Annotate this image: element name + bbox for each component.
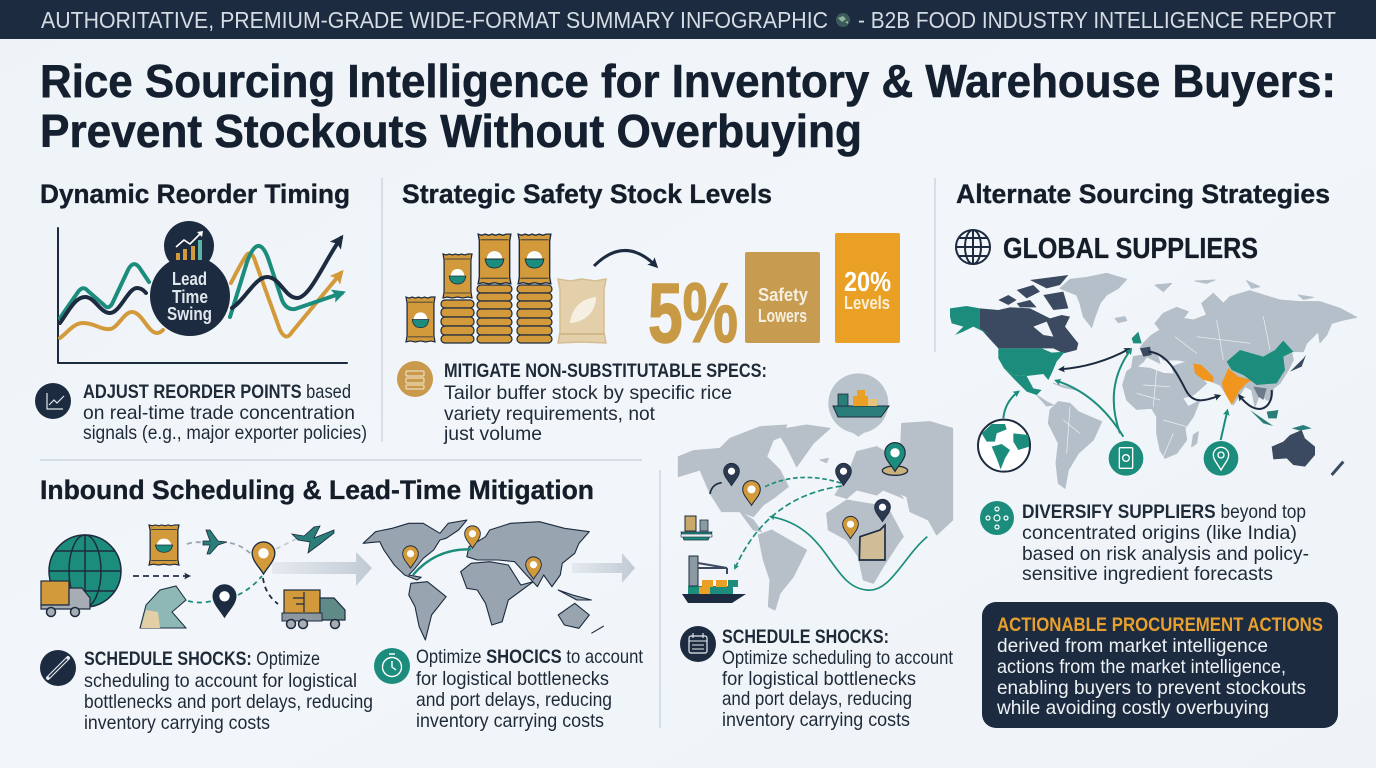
panel: alternate sourcing strategies <box>950 179 1357 728</box>
text: mitigate specs: just volume <box>443 423 542 445</box>
top banner: - B2B FOOD INDUSTRY INTELLIGENCE REPORT <box>858 7 1336 33</box>
panel: strategic safety stock levels <box>397 179 900 445</box>
world map: supplier regions <box>950 273 1357 488</box>
callout: actionable procurement actions: ACTIONABLE PROCUREMENT ACTIONS <box>997 614 1323 636</box>
text: diversify suppliers: concentrated origins (like India) <box>1022 522 1297 544</box>
text: schedule shocks right: SCHEDULE SHOCKS: <box>722 626 889 648</box>
lead time swing badge: Time <box>172 287 208 307</box>
icon: container ship top <box>833 390 889 417</box>
text: schedule shocks left: bottlenecks and port delays, reducing <box>84 691 373 713</box>
callout: actionable procurement actions: actions from the market intelligence, <box>997 656 1286 678</box>
text: diversify suppliers: based on risk analysis and policy- <box>1022 543 1309 565</box>
text: schedule shocks left: SCHEDULE SHOCKS: Optimize <box>84 648 320 670</box>
lead time swing badge: Lead <box>172 269 207 289</box>
text: mitigate specs: variety requirements, not <box>444 403 656 425</box>
pin: map south asia <box>526 557 541 579</box>
pin: gold africa <box>843 516 858 539</box>
icon: map fragment <box>140 586 186 628</box>
icon: small ship <box>681 516 712 540</box>
text: schedule shocks left: scheduling to account for logistical <box>84 670 357 692</box>
text: mitigate specs <box>443 360 767 445</box>
box: 20% levels: Levels <box>844 293 890 313</box>
text: optimize shocics: and port delays, reducing <box>416 689 612 711</box>
text: adjust reorder points: signals (e.g., major exporter policies) <box>83 422 367 444</box>
text: mitigate specs: Tailor buffer stock by specific rice <box>444 382 732 404</box>
heading: inbound scheduling: Inbound Scheduling & Lead-Time Mitigation <box>40 475 594 505</box>
top banner <box>0 0 1376 39</box>
pin: gold america <box>743 481 760 505</box>
title <box>40 55 1336 157</box>
arrow: large grey <box>272 552 372 586</box>
text: schedule shocks right: Optimize scheduling to account <box>722 647 953 669</box>
box: 20% levels <box>835 233 900 343</box>
lead time swing badge <box>150 221 230 336</box>
icon: wrench <box>40 650 76 686</box>
icon: large plane <box>292 526 334 553</box>
top banner: AUTHORITATIVE, PREMIUM-GRADE WIDE-FORMAT SUMMARY INFOGRAPHIC <box>41 7 828 33</box>
text: adjust reorder points <box>83 381 367 444</box>
subheading: global suppliers: GLOBAL SUPPLIERS <box>1003 233 1258 265</box>
text: optimize shocics: Optimize SHOCICS to account <box>416 646 643 668</box>
text: schedule shocks right: inventory carrying costs <box>722 709 910 731</box>
text: schedule shocks right: and port delays, reducing <box>722 688 912 710</box>
title: Prevent Stockouts Without Overbuying <box>40 105 862 157</box>
text: optimize shocics <box>416 646 643 732</box>
panel: dynamic reorder timing <box>35 179 367 444</box>
beige rice bag <box>558 279 606 343</box>
box: 20% levels: 20% <box>844 266 891 297</box>
text: optimize shocics: inventory carrying costs <box>416 710 604 732</box>
icon: network <box>980 501 1014 535</box>
callout: actionable procurement actions: derived from market intelligence <box>997 635 1268 657</box>
text: optimize shocics: for logistical bottlenecks <box>416 668 609 690</box>
pin: map europe <box>465 526 480 548</box>
arrow: dashed <box>133 575 189 577</box>
callout: actionable procurement actions <box>982 602 1338 728</box>
pin: navy west <box>724 463 739 486</box>
text: schedule shocks left: inventory carrying costs <box>84 712 270 734</box>
arrow: curved <box>594 250 656 266</box>
pin: navy <box>213 585 236 617</box>
lead time swing badge: Swing <box>167 304 212 324</box>
text: diversify suppliers <box>1022 501 1309 585</box>
world map: shipping routes <box>678 373 953 610</box>
callout: actionable procurement actions: while avoiding costly overbuying <box>996 697 1269 719</box>
icon: stopwatch <box>374 648 410 684</box>
pin: map north america <box>403 546 418 568</box>
box: safety lowers: Safety <box>758 285 808 305</box>
logistics routes <box>187 539 296 604</box>
title: Rice Sourcing Intelligence for Inventory & Warehouse Buyers: <box>40 55 1336 107</box>
text: adjust reorder points: ADJUST REORDER POINTS based <box>83 381 351 403</box>
box: safety lowers <box>745 252 820 343</box>
text: schedule shocks left <box>84 648 373 734</box>
panel: inbound scheduling and lead-time mitigation <box>40 475 643 734</box>
callout: actionable procurement actions: enabling buyers to prevent stockouts <box>997 677 1306 699</box>
panel: shipping routes <box>678 373 953 731</box>
icon: trend chart <box>35 383 71 419</box>
icon: cargo ship with crane <box>682 556 746 603</box>
icon: spec labels <box>397 361 433 397</box>
pin: gold <box>252 542 275 574</box>
icon: calendar <box>680 626 716 662</box>
text: mitigate specs: MITIGATE NON-SUBSTITUTABLE SPECS: <box>444 360 767 382</box>
heading: alternate sourcing strategies: Alternate Sourcing Strategies <box>956 179 1330 209</box>
text: schedule shocks right: for logistical bottlenecks <box>722 668 916 690</box>
text: adjust reorder points: on real-time trade concentration <box>83 402 355 424</box>
line chart: lead time swing <box>58 228 347 363</box>
icon: globe with delivery truck <box>41 535 121 616</box>
text: schedule shocks right <box>722 626 953 731</box>
box: safety lowers: Lowers <box>758 306 807 326</box>
icon: globe <box>956 230 990 264</box>
pin: navy europe <box>836 463 851 486</box>
text: diversify suppliers: DIVERSIFY SUPPLIERS beyond top <box>1022 501 1306 523</box>
world map: routes <box>363 520 604 640</box>
heading: strategic safety stock levels: Strategic Safety Stock Levels <box>402 179 772 209</box>
icon: rice bag <box>149 525 179 565</box>
rice bag stacks <box>406 234 552 343</box>
stat: 5%: 5% <box>648 266 738 360</box>
icon: small plane <box>203 530 227 554</box>
pin: navy africa <box>875 499 890 522</box>
icon: cargo truck <box>282 590 345 628</box>
heading: dynamic reorder timing: Dynamic Reorder Timing <box>40 179 350 209</box>
pin: teal east <box>885 443 905 471</box>
text: diversify suppliers: sensitive ingredient forecasts <box>1022 563 1273 585</box>
arrow: grey continuation <box>572 553 635 583</box>
